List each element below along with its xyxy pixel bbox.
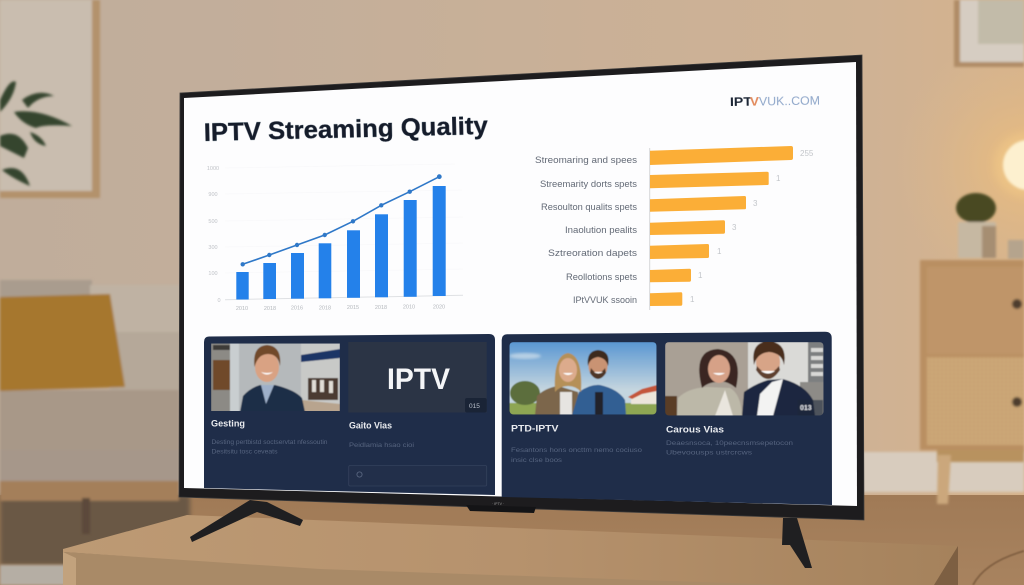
photo: couple outdoors xyxy=(509,342,657,415)
x axis labels xyxy=(236,304,445,312)
card text: Gesting: Gesting xyxy=(211,418,245,430)
bar values: 1 xyxy=(690,295,695,304)
card text: Gaito Vias: Peidlamia hsao cioi xyxy=(349,443,414,449)
orange bars xyxy=(650,146,793,306)
card text: PTD-IPTV xyxy=(511,424,643,464)
plant in pot xyxy=(956,193,996,258)
category labels: Resoulton qualits spets xyxy=(541,202,637,212)
y axis labels xyxy=(207,166,221,304)
category labels: Inaolution pealits xyxy=(565,225,637,235)
card text: PTD-IPTV: insic clse boos xyxy=(511,458,562,464)
logo: IPTVVUK.COM: VUK..COM xyxy=(759,96,820,109)
card text: PTD-IPTV: Fesantons hons oncttm nemo cociuso xyxy=(511,448,643,454)
trend line xyxy=(240,174,442,266)
category labels: Streomaring and spees xyxy=(535,155,637,165)
wall art: left frame xyxy=(0,0,100,198)
logo: IPTVVUK.COM: V xyxy=(750,97,759,109)
sofa xyxy=(0,280,180,534)
photo: couple indoors: 013 xyxy=(800,405,812,412)
logo: IPTVVUK.COM xyxy=(730,96,820,109)
TV stand legs xyxy=(190,500,812,568)
logo: IPTVVUK.COM: IPT xyxy=(730,97,752,109)
TV centre logo notch: · IPTV · xyxy=(492,502,504,506)
screen xyxy=(184,62,857,506)
card text: Gaito Vias xyxy=(349,420,414,449)
y axis labels: 100 xyxy=(208,271,218,277)
category labels xyxy=(535,155,637,305)
gridlines xyxy=(225,164,463,273)
x axis labels: 2015 xyxy=(347,305,359,311)
x axis labels: 2018 xyxy=(319,306,331,312)
card text: Gesting: Desting pertbistd soctservtat nfessoutin xyxy=(212,440,328,446)
y axis labels: 0 xyxy=(217,298,221,304)
card text: Gaito Vias: Gaito Vias xyxy=(349,420,392,432)
card text: Carous Vias: Ubevoousps ustrcrcws xyxy=(666,450,752,456)
horizontal bar chart: speeds xyxy=(535,146,814,310)
y axis labels: 300 xyxy=(208,245,218,251)
card text: Gesting: Desitsitu tosc ceveats xyxy=(212,450,278,456)
bar values: 1 xyxy=(698,271,703,280)
bar values: 255 xyxy=(800,149,814,158)
lamp xyxy=(994,133,1024,197)
wooden TV table xyxy=(63,515,958,585)
bar values: 1 xyxy=(717,247,722,256)
bar values xyxy=(690,149,814,304)
bar values: 1 xyxy=(776,174,781,183)
category labels: Sztreoration dapets xyxy=(548,248,637,258)
search box xyxy=(349,466,487,486)
y axis labels: 900 xyxy=(208,192,218,198)
TV centre logo notch xyxy=(466,502,536,513)
photo: presenter in room xyxy=(211,343,340,412)
x axis labels: 2020 xyxy=(433,304,445,310)
card text: Gesting xyxy=(211,418,328,456)
bar values: 3 xyxy=(753,199,758,208)
small box on cabinet xyxy=(1008,240,1024,259)
thumbnail: IPTV tile: 015 xyxy=(469,403,480,410)
thumbnail: IPTV tile: IPTV xyxy=(387,363,450,396)
cabinet xyxy=(920,260,1024,504)
plant: left xyxy=(0,81,72,186)
thumbnail: IPTV tile xyxy=(348,342,487,412)
x axis labels: 2016 xyxy=(291,306,303,312)
category labels: Reollotions spets xyxy=(566,272,637,282)
photo: couple indoors xyxy=(665,341,824,416)
bar values: 3 xyxy=(732,223,737,232)
panel: right navy card xyxy=(502,332,832,505)
card text: Carous Vias xyxy=(666,424,793,456)
wall art: right frame xyxy=(954,0,1024,67)
card text: Carous Vias: Carous Vias xyxy=(666,424,724,436)
x axis labels: 2018 xyxy=(264,306,276,312)
card text: PTD-IPTV: PTD-IPTV xyxy=(511,424,559,434)
x axis labels: 2010 xyxy=(236,306,248,312)
x axis labels: 2010 xyxy=(403,304,415,310)
TV bezel xyxy=(179,55,864,520)
y axis labels: 500 xyxy=(208,219,218,225)
title: IPTV Streaming Quality xyxy=(203,112,488,147)
bar and line chart: streaming quality growth xyxy=(207,164,463,312)
card text: Carous Vias: Deaesnsoca, 10peecnsmsepetocon xyxy=(666,441,793,447)
x axis labels: 2018 xyxy=(375,305,387,311)
category labels: Streemarity dorts spets xyxy=(540,179,637,189)
panel: left navy card xyxy=(204,334,495,495)
y axis labels: 1000 xyxy=(207,166,219,172)
bars xyxy=(236,186,446,300)
category labels: IPtVVUK ssooin xyxy=(573,295,637,305)
